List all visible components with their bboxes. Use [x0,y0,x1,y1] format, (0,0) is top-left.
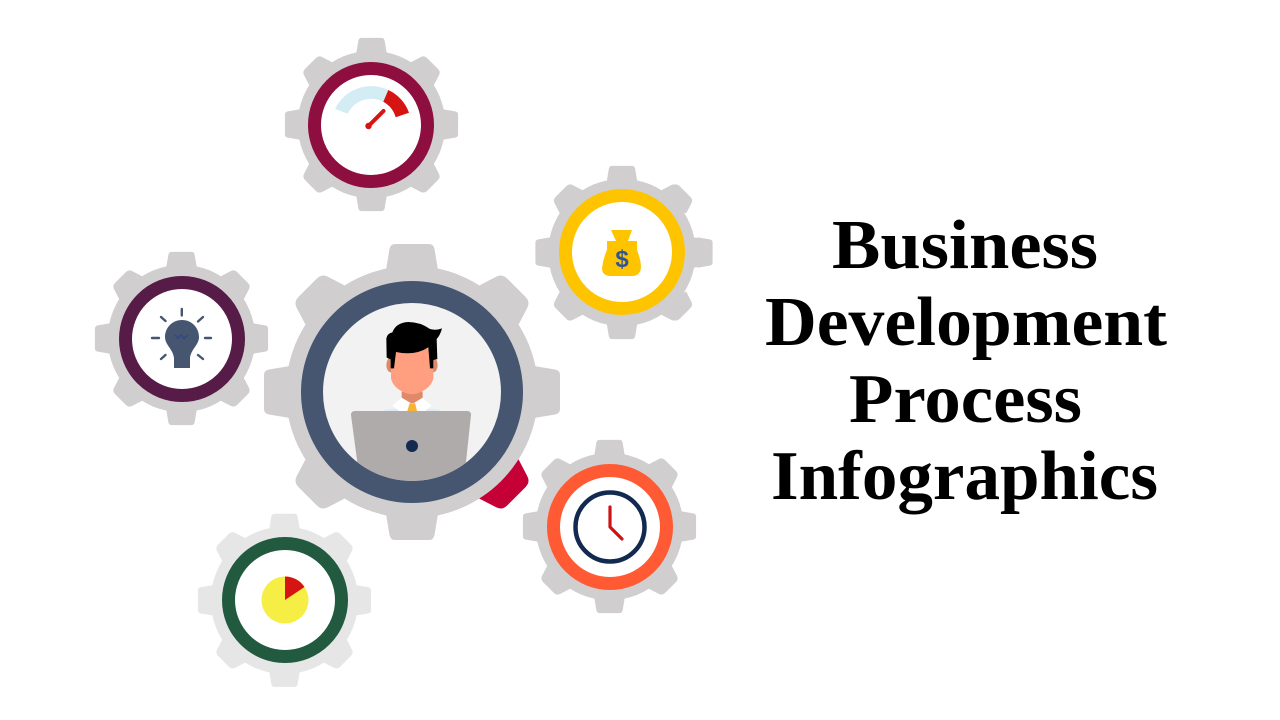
gear: pie chart [198,514,371,687]
icon: clock [576,492,644,562]
icon: speedometer gauge [335,86,409,129]
central gear: businessman at laptop [264,244,560,540]
dollar sign: $ [615,246,629,273]
icon: light bulb with rays [152,309,211,368]
title: Development [765,284,1167,361]
highlighted gear tooth [478,458,536,516]
gear: money bag [535,166,713,339]
icon: money bag [602,230,641,276]
laptop [351,411,471,481]
gear: light bulb [95,252,268,425]
icon: pie chart [262,576,308,624]
gear: clock [523,440,696,613]
title: Process [849,361,1082,438]
icon: businessman [351,322,471,490]
gear: speedometer [285,38,458,211]
title: Business [832,207,1098,284]
title: Infographics [771,438,1158,515]
title [765,207,1167,515]
